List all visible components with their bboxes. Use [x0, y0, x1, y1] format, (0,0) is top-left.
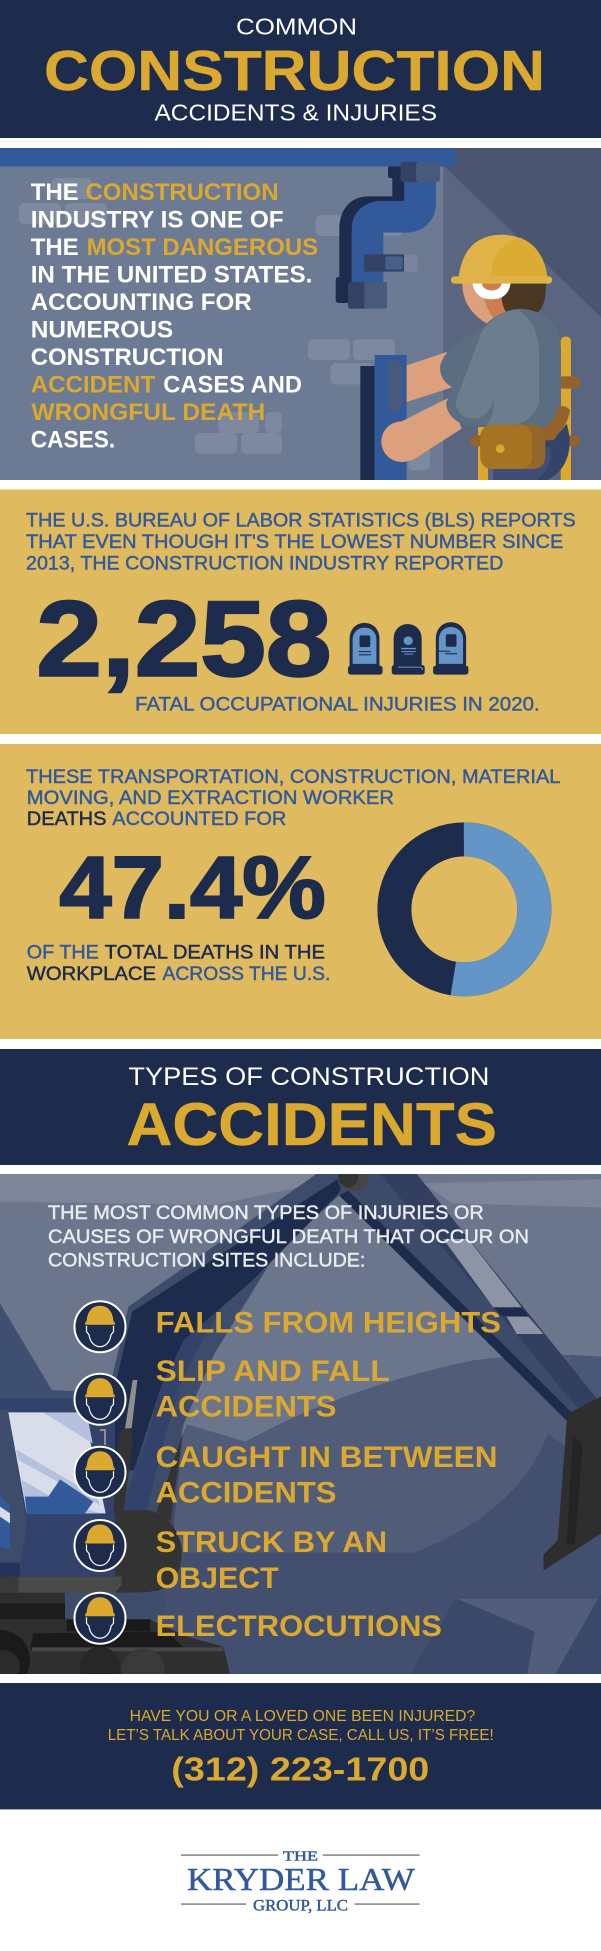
- ladder: [470, 336, 580, 484]
- logo: the kryder law group: [181, 1849, 420, 1914]
- intro text: ACCOUNTING FOR: [31, 289, 252, 316]
- phone number: (312) 223-1700: [171, 1750, 429, 1788]
- panel: fatal injuries statistic: [0, 490, 601, 734]
- panel: types heading: [0, 1049, 601, 1165]
- excavator background: [0, 1174, 601, 1674]
- percentage lead-in text: ACCOUNTED FOR: [112, 809, 286, 830]
- percentage caption: TOTAL DEATHS IN THE: [105, 943, 325, 964]
- intro text: CONSTRUCTION: [86, 179, 278, 206]
- heading: common: COMMON: [236, 14, 357, 40]
- list item: electrocutions: [74, 1593, 442, 1644]
- logo: the kryder law group: KRYDER LAW: [187, 1861, 416, 1897]
- statistic lead-in text: THAT EVEN THOUGH IT'S THE LOWEST NUMBER SINCE: [26, 532, 563, 553]
- percentage caption: ACROSS THE U.S.: [162, 964, 330, 985]
- donut chart: [394, 839, 534, 979]
- intro text: THE: [31, 179, 79, 206]
- statistic lead-in text: 2013, THE CONSTRUCTION INDUSTRY REPORTED: [26, 553, 503, 574]
- call to action text: HAVE YOU OR A LOVED ONE BEEN INJURED?: [130, 1708, 476, 1725]
- intro text: INDUSTRY IS ONE OF: [31, 206, 284, 233]
- intro text: IN THE UNITED STATES.: [31, 261, 312, 288]
- logo: the kryder law group: GROUP, LLC: [253, 1898, 348, 1914]
- panel: call to action: [0, 1683, 601, 1809]
- panel: percentage statistic: [0, 744, 601, 1039]
- worker scene: [308, 147, 601, 484]
- percentage lead-in text: [26, 767, 560, 830]
- big number 47.4%: 47.4%: [59, 838, 326, 937]
- percentage lead-in text: DEATHS: [27, 809, 106, 830]
- bricks: [19, 178, 395, 454]
- list item: slip and fall accidents: [74, 1355, 390, 1425]
- logo: the kryder law group: THE: [283, 1849, 318, 1864]
- intro text: MOST DANGEROUS: [87, 234, 318, 261]
- intro text: [31, 179, 318, 453]
- heading: construction: CONSTRUCTION: [44, 39, 545, 103]
- statistic lead-in text: THE U.S. BUREAU OF LABOR STATISTICS (BLS) REPORTS: [26, 510, 576, 531]
- panel: header: [0, 0, 601, 138]
- list item: struck by an object: OBJECT: [156, 1562, 279, 1595]
- percentage caption: WORKPLACE: [27, 964, 156, 985]
- list item: slip and fall accidents: SLIP AND FALL: [156, 1355, 390, 1388]
- list item: slip and fall accidents: ACCIDENTS: [156, 1391, 336, 1424]
- excavator bucket: [544, 1396, 601, 1570]
- section intro text: CONSTRUCTION SITES INCLUDE:: [48, 1250, 365, 1272]
- list item: struck by an object: [74, 1520, 387, 1595]
- big number 2,258: 2,258: [36, 579, 331, 699]
- call to action text: [108, 1708, 494, 1744]
- excavator boom: [338, 1165, 601, 1421]
- intro text: CONSTRUCTION: [31, 344, 224, 371]
- intro text: NUMEROUS: [31, 317, 173, 344]
- list item: caught in between accidents: ACCIDENTS: [156, 1477, 336, 1510]
- intro text: WRONGFUL DEATH: [31, 399, 265, 426]
- icon: three tombstones: [348, 622, 468, 675]
- percentage lead-in text: MOVING, AND EXTRACTION WORKER: [27, 788, 394, 809]
- heading: accidents and injuries: ACCIDENTS & INJURIES: [154, 100, 437, 126]
- roof beam: [0, 147, 456, 182]
- worker: [381, 235, 570, 481]
- excavator cab and tracks: [0, 1380, 230, 1692]
- intro text: CASES.: [31, 426, 115, 453]
- heading: types of construction: TYPES OF CONSTRUCTION: [128, 1063, 489, 1091]
- section intro text: [48, 1205, 528, 1267]
- percentage lead-in text: THESE TRANSPORTATION, CONSTRUCTION, MATERIAL: [26, 767, 560, 788]
- panel: intro with worker illustration: [0, 147, 601, 484]
- list item: falls from heights: [74, 1301, 501, 1352]
- intro text: THE: [31, 234, 79, 261]
- list item: electrocutions: ELECTROCUTIONS: [156, 1610, 442, 1643]
- list item: caught in between accidents: [74, 1446, 496, 1503]
- percentage caption: [27, 943, 330, 985]
- pipe: [336, 166, 436, 309]
- percentage caption: OF THE: [27, 943, 99, 964]
- intro text: CASES AND: [163, 372, 302, 399]
- list item: falls from heights: FALLS FROM HEIGHTS: [156, 1306, 501, 1339]
- intro text: ACCIDENT: [31, 372, 155, 399]
- list item: struck by an object: STRUCK BY AN: [156, 1526, 387, 1559]
- statistic caption: FATAL OCCUPATIONAL INJURIES IN 2020.: [135, 694, 540, 715]
- level tool: [360, 355, 407, 481]
- section intro text: THE MOST COMMON TYPES OF INJURIES OR: [48, 1202, 484, 1224]
- call to action text: LET’S TALK ABOUT YOUR CASE, CALL US, IT’S FREE!: [108, 1727, 494, 1744]
- list item: caught in between accidents: CAUGHT IN BETWEEN: [156, 1441, 497, 1474]
- heading: accidents: ACCIDENTS: [126, 1091, 497, 1158]
- statistic lead-in text: [26, 510, 576, 574]
- section intro text: CAUSES OF WRONGFUL DEATH THAT OCCUR ON: [48, 1226, 529, 1248]
- panel: accident types with excavator scene: [0, 1165, 601, 1692]
